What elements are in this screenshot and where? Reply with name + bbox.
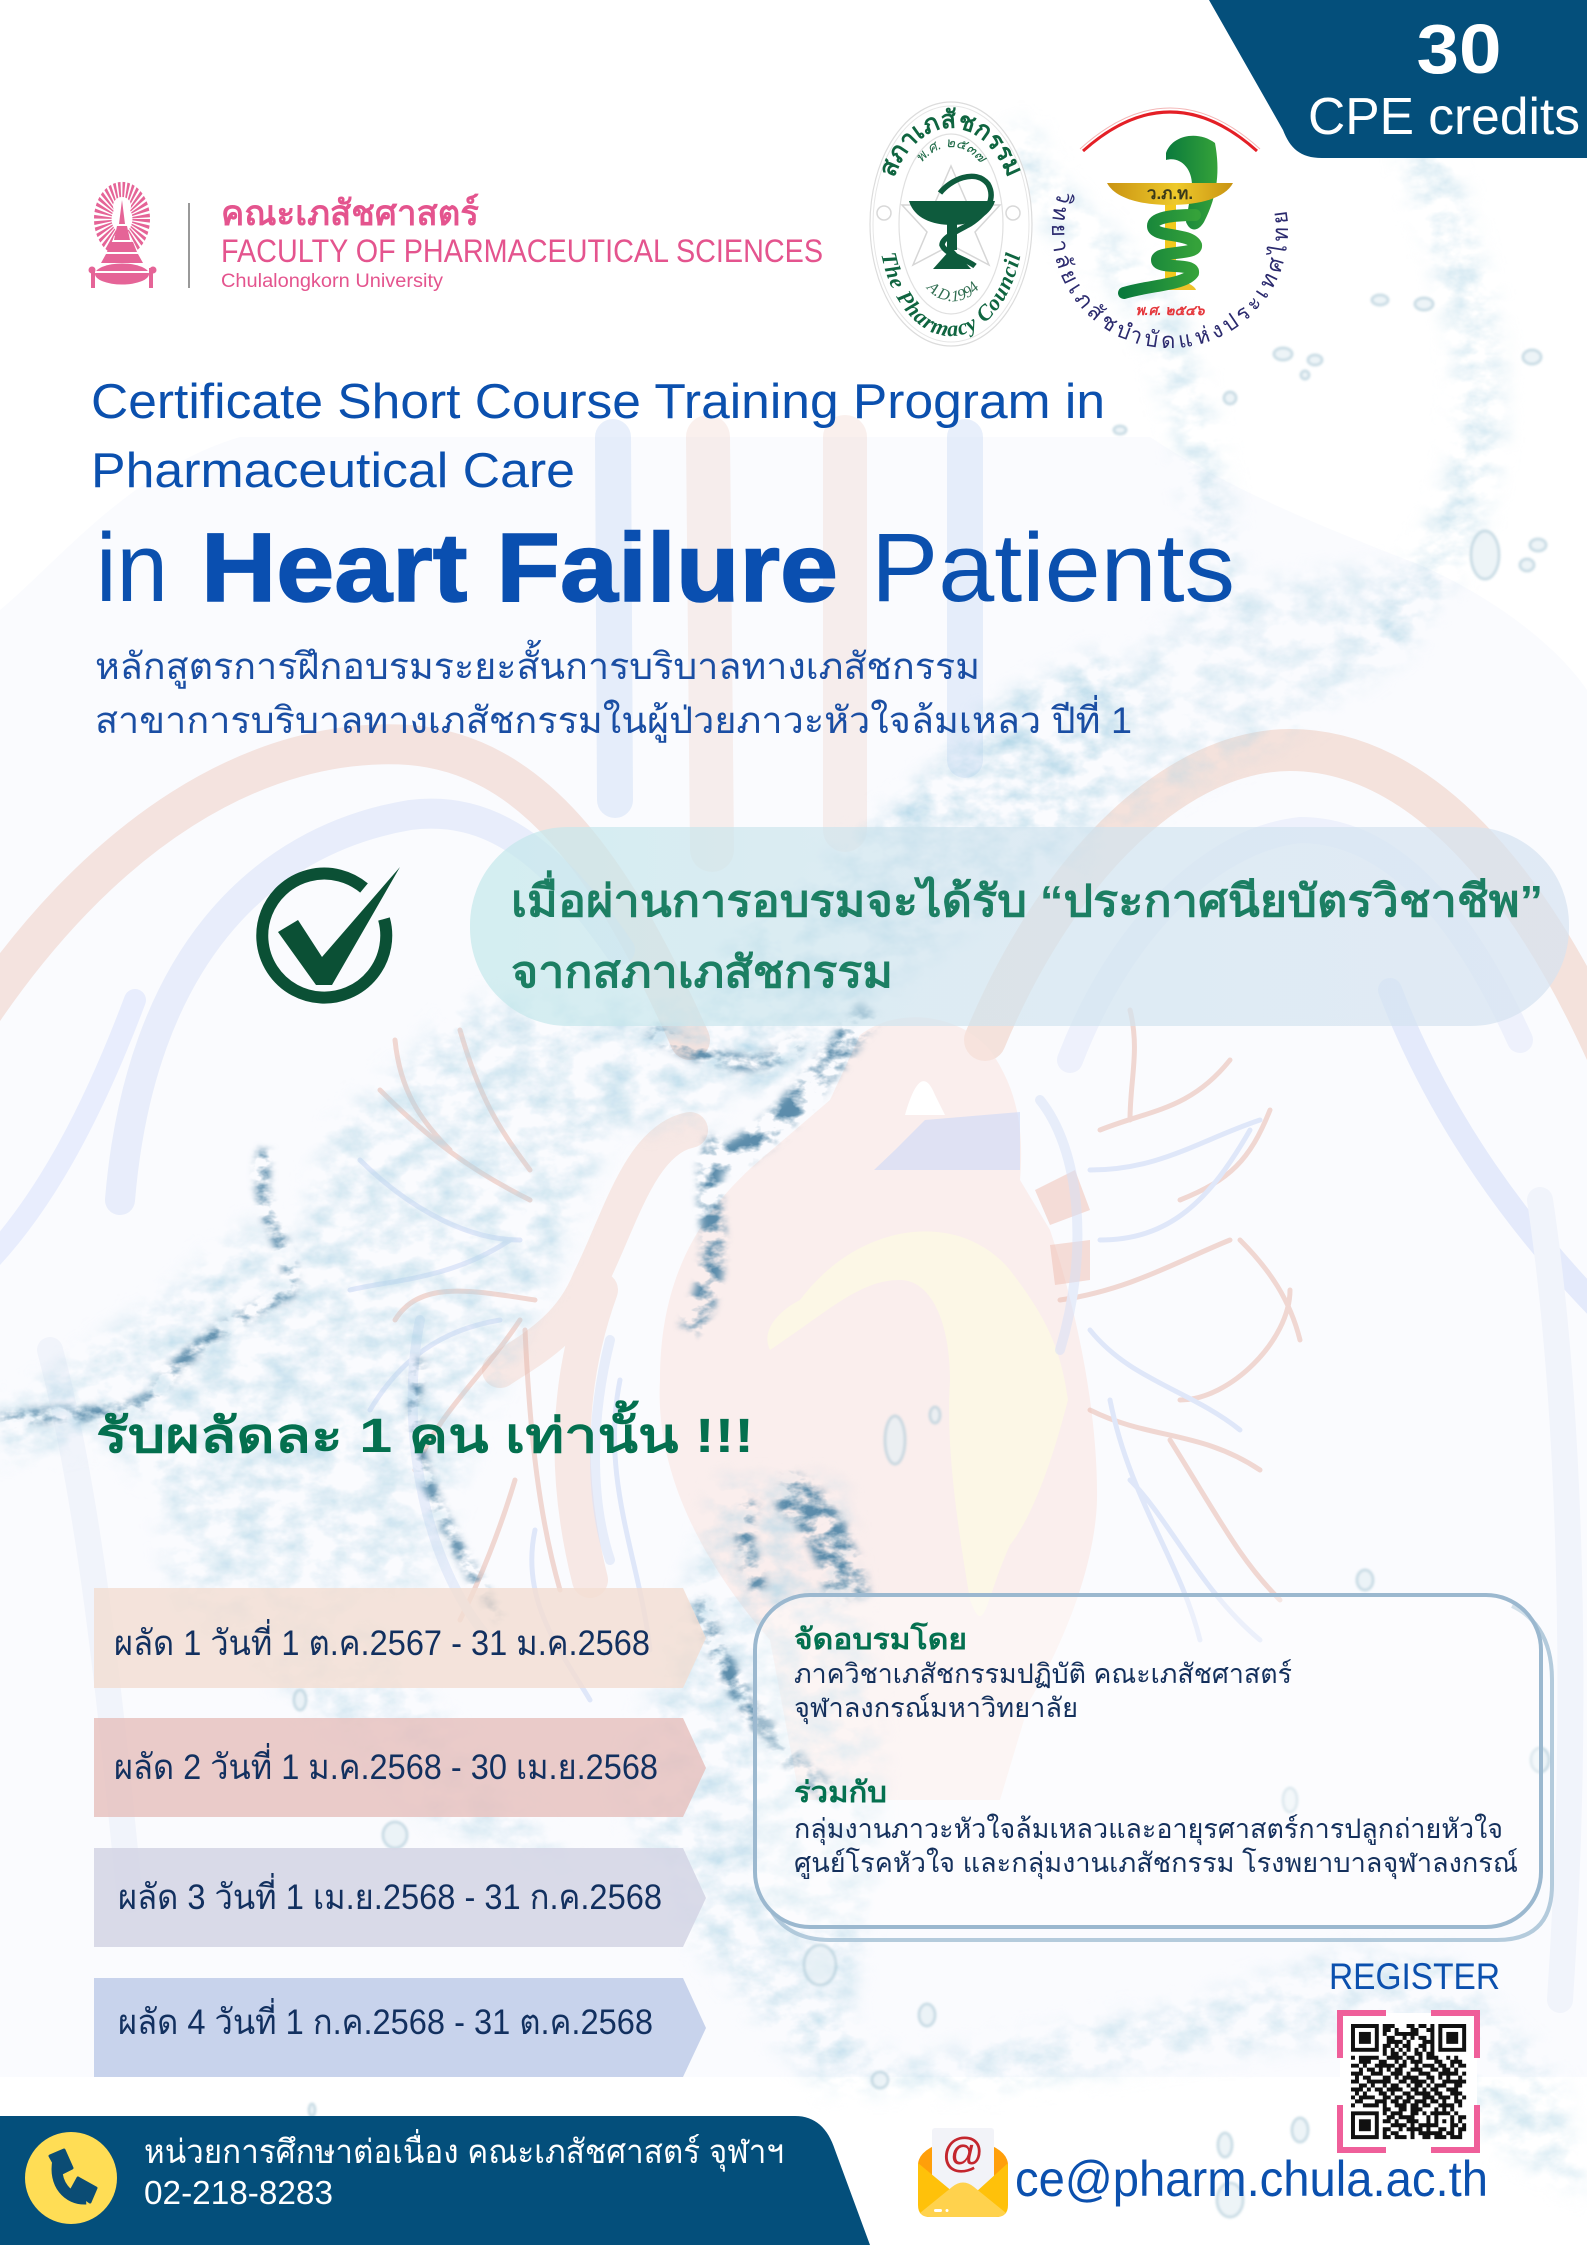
label: register: REGISTER [1329, 1956, 1500, 1997]
icon: snake and gold bowl [1107, 136, 1233, 293]
title: in Heart Failure Patients: Patients [871, 513, 1235, 622]
panel: organisers: จัดอบรมโดย [794, 1621, 967, 1656]
icon: check mark [262, 867, 400, 998]
subtitle: Thai program name: สาขาการบริบาลทางเภสัชกรรมในผู้ป่วยภาวะหัวใจล้มเหลว ปีที่ 1 [95, 694, 1132, 743]
badge: 30 CPE credits: CPE credits [1308, 88, 1580, 146]
panel: certificate callout pill: จากสภาเภสัชกรรม [511, 948, 893, 997]
logo: Faculty of Pharmaceutical Sciences: Chulalongkorn University [221, 271, 444, 292]
icon: Chulalongkorn emblem [88, 194, 156, 288]
title: in Heart Failure Patients: Heart Failure [201, 513, 838, 622]
panel: certificate callout pill [470, 827, 1569, 1026]
logo: The Pharmacy Council: สภาเภสัชกรรม [882, 107, 1021, 176]
logo: Faculty of Pharmaceutical Sciences: FACULTY OF PHARMACEUTICAL SCIENCES [221, 233, 823, 269]
panel: organisers [755, 1595, 1552, 1940]
footer: contact bar: หน่วยการศึกษาต่อเนื่อง คณะเภสัชศาสตร์ จุฬาฯ [144, 2129, 784, 2172]
vessels [0, 437, 1587, 2000]
water splash: dark streaks [0, 1010, 870, 1800]
title: certificate program lines: Certificate Short Course Training Program in [91, 375, 1105, 429]
arrow: round 1: ผลัด 1 วันที่ 1 ต.ค.2567 - 31 ม.ค.2568 [114, 1619, 650, 1663]
icon: email envelope [918, 2128, 1008, 2217]
body tint panel [0, 437, 1587, 2077]
arrow: round 3 [94, 1848, 706, 1947]
subtitle: Thai program name: หลักสูตรการฝึกอบรมระยะสั้นการบริบาลทางเภสัชกรรม [95, 639, 980, 689]
website address: ce@pharm.chula.ac.th [1015, 2151, 1488, 2207]
icon: bowl of Hygieia [909, 176, 995, 269]
logo: College of Pharmacotherapy of Thailand [1052, 108, 1288, 348]
arrow: round 4: ผลัด 4 วันที่ 1 ก.ค.2568 - 31 ต.ค.2568 [118, 1998, 653, 2042]
title: certificate program lines: Pharmaceutical Care [91, 444, 575, 498]
title: certificate program lines [91, 375, 1105, 498]
lung branches [350, 1010, 1300, 1700]
footer: contact bar: 02-218-8283 [144, 2174, 333, 2211]
badge: 30 CPE credits: 30 [1416, 10, 1502, 88]
badge: 30 CPE credits [1209, 0, 1587, 158]
icon: email envelope: @ [942, 2129, 984, 2176]
panel: organisers: จุฬาลงกรณ์มหาวิทยาลัย [794, 1692, 1078, 1725]
arrow: round 2 [94, 1718, 706, 1817]
logo: The Pharmacy Council: A.D.1994 [926, 281, 978, 302]
footer: contact bar [0, 2116, 870, 2245]
panel: certificate callout pill: เมื่อผ่านการอบรมจะได้รับ “ประกาศนียบัตรวิชาชีพ” [511, 870, 1543, 926]
QR code [1340, 2013, 1477, 2150]
arrow: round 3: ผลัด 3 วันที่ 1 เม.ย.2568 - 31 ก.ค.2568 [118, 1873, 662, 1917]
logo: Faculty of Pharmaceutical Sciences: คณะเภสัชศาสตร์ [221, 193, 479, 233]
subtitle: Thai program name [95, 639, 1132, 743]
icon: telephone [25, 2132, 117, 2224]
panel: organisers: ร่วมกับ [794, 1777, 887, 1809]
water droplets [294, 295, 1549, 2217]
heart [500, 1017, 1097, 1800]
arrow: round 4 [94, 1978, 706, 2077]
icon: snake and gold bowl: ว.ภ.ท. [1147, 184, 1193, 203]
logo: Faculty of Pharmaceutical Sciences [88, 193, 823, 292]
panel: organisers: กลุ่มงานภาวะหัวใจล้มเหลวและอายุรศาสตร์การปลูกถ่ายหัวใจ [794, 1813, 1503, 1846]
logo: The Pharmacy Council: The Pharmacy Council [882, 252, 1020, 338]
divider [188, 203, 190, 288]
logo: The Pharmacy Council [870, 102, 1032, 346]
heading: one person per round: รับผลัดละ 1 คน เท่านั้น !!! [96, 1400, 754, 1463]
title: in Heart Failure Patients: in [96, 513, 168, 622]
logo: College of Pharmacotherapy of Thailand: พ.ศ. ๒๕๔๖ [1135, 302, 1206, 318]
arrow: round 1 [94, 1588, 706, 1688]
logo: The Pharmacy Council: พ.ศ. ๒๕๓๗ [918, 140, 987, 162]
arrow: round 2: ผลัด 2 วันที่ 1 ม.ค.2568 - 30 เม.ย.2568 [114, 1743, 658, 1787]
panel: organisers: ศูนย์โรคหัวใจ และกลุ่มงานเภสัชกรรม โรงพยาบาลจุฬาลงกรณ์ [794, 1847, 1518, 1880]
panel: organisers: ภาควิชาเภสัชกรรมปฏิบัติ คณะเภสัชศาสตร์ [794, 1658, 1292, 1689]
title: in Heart Failure Patients [96, 513, 1235, 622]
logo: College of Pharmacotherapy of Thailand: วิทยาลัยเภสัชบำบัดแห่งประเทศไทย [1052, 194, 1288, 348]
